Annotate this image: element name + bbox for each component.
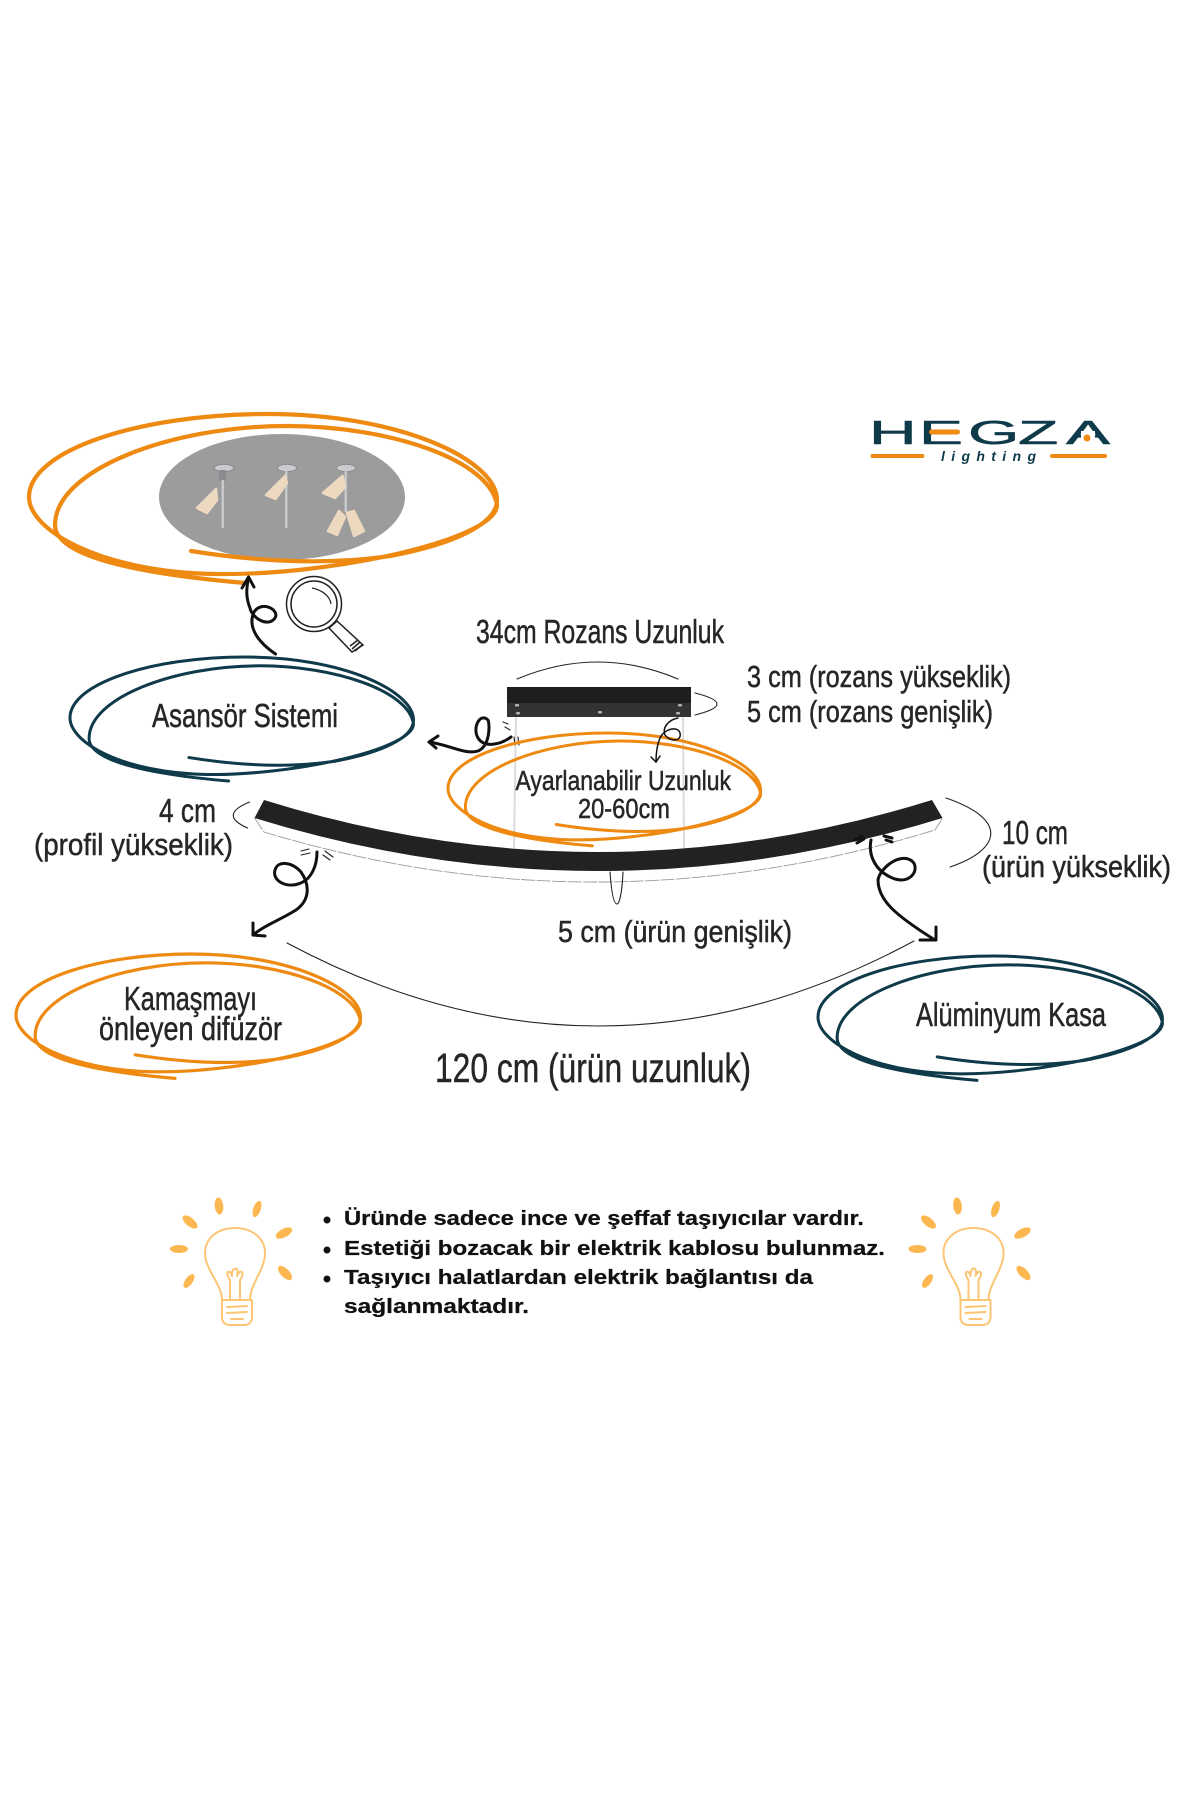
scribble: lift system [70,657,414,781]
bullet list: Taşıyıcı halatlardan elektrik bağlantısı da [344,1267,814,1289]
arc: rosette height [695,693,717,715]
arc: product height [946,798,991,867]
grey ellipse with lift system detail [159,434,405,560]
arrow: rosette to adjustable length [651,718,680,762]
label: aluminium case: Alüminyum Kasa [916,996,1106,1033]
label: product length: 120 cm (ürün uzunluk) [435,1045,751,1091]
label: adjustable length: 20-60cm [578,793,670,824]
curved LED bar [254,800,942,871]
bullet list: Estetiği bozacak bir elektrik kablosu bulunmaz. [344,1238,885,1260]
label: adjustable length: Ayarlanabilir Uzunluk [516,765,732,796]
icon: magnifier [286,576,363,652]
arrow: rosette cable to lift system [429,718,519,752]
label: anti-glare diffuser: Kamaşmayı [124,980,257,1017]
orange scribble around detail [29,414,497,583]
arc: rosette length [517,662,678,679]
logo: Hegza lighting: lighting [941,448,1036,464]
label: 34cm rosette length: 34cm Rozans Uzunluk [476,613,724,650]
arrow: aluminium case [855,836,936,940]
label: Asansör Sistemi: Asansör Sistemi [152,697,338,734]
label: anti-glare diffuser: önleyen difüzör [99,1010,282,1047]
arrow: lift system up to detail [242,577,276,654]
label: profile height: (profil yükseklik) [34,827,233,862]
label: product width: 5 cm (ürün genişlik) [558,914,792,949]
step 3 [323,464,364,536]
label: anti-glare diffuser [99,980,282,1047]
step 2 [266,464,296,528]
bullet list: sağlanmaktadır. [344,1296,529,1318]
diffuser outline [254,818,942,882]
label: adjustable length [516,765,732,824]
arc: product width [610,872,623,904]
rosette canopy [507,687,691,717]
arc: profile height [233,802,250,828]
label: 4 cm: 4 cm [159,792,216,829]
scribble: adjustable length [448,733,761,846]
scribble: aluminium case [818,956,1162,1080]
logo: Hegza lighting: HEGZA [869,415,1110,452]
wires [514,716,684,848]
icon: right light bulb [908,1197,1033,1325]
scribble: diffuser [16,954,360,1078]
label: product height: (ürün yükseklik) [982,849,1171,884]
bullet list [324,1207,885,1318]
arrow: diffuser [253,849,333,936]
label: rosette width: 5 cm (rozans genişlik) [747,694,993,729]
icon: left light bulb [170,1197,294,1325]
label: 10 cm: 10 cm [1002,814,1068,851]
bullet list: Üründe sadece ince ve şeffaf taşıyıcılar vardır. [344,1207,864,1230]
arc: product length [287,941,914,1026]
step 1 [197,464,234,528]
label: rosette height: 3 cm (rozans yükseklik) [747,659,1011,694]
